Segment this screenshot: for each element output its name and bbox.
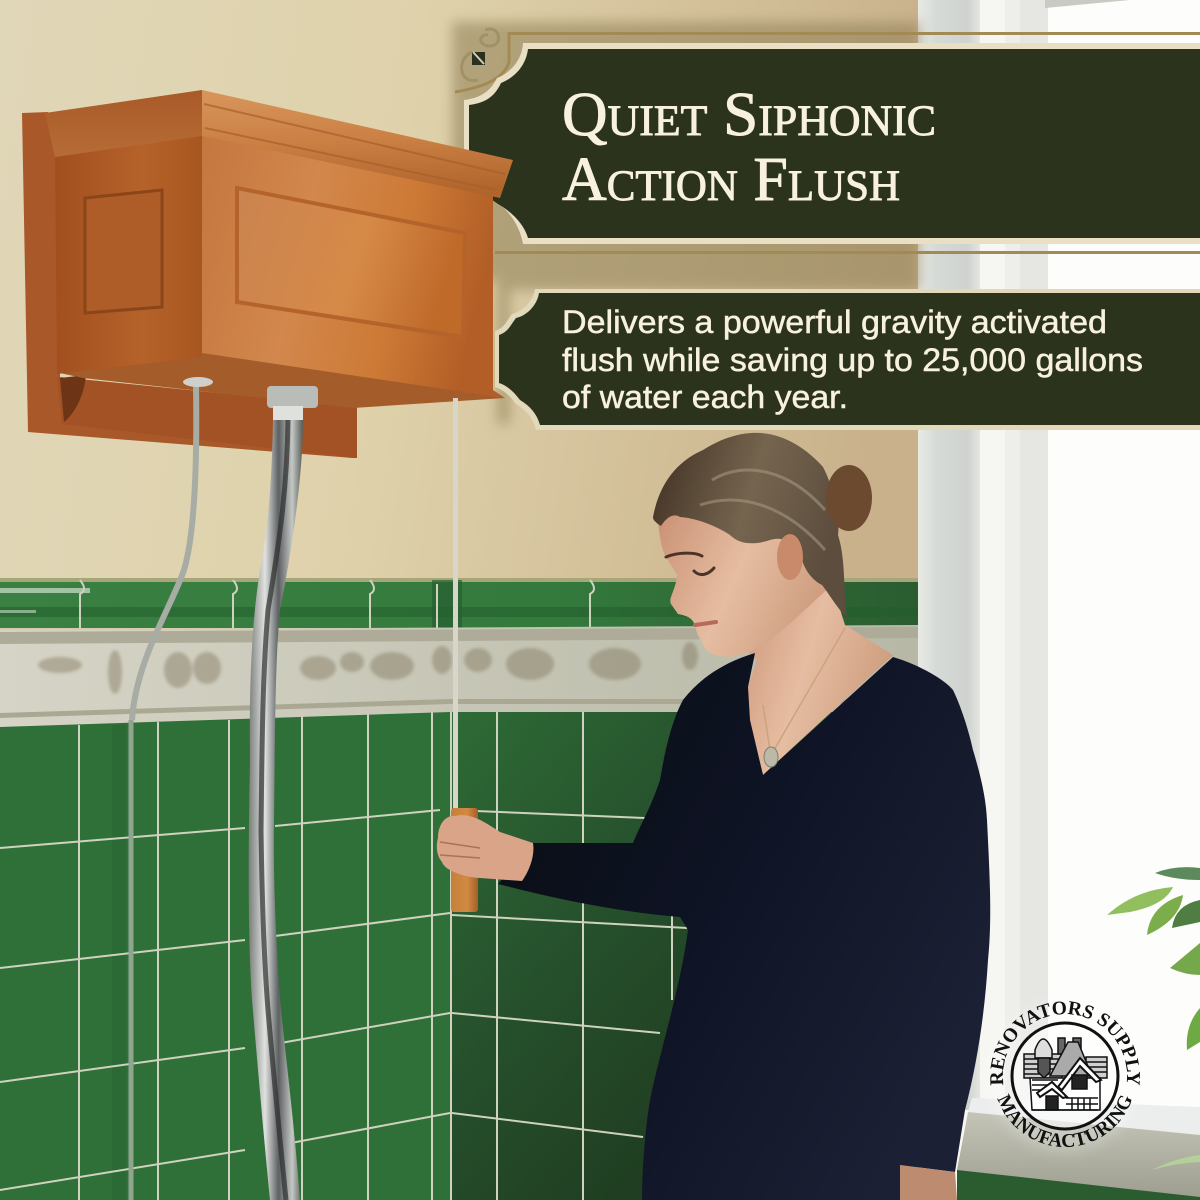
ear bbox=[777, 534, 803, 580]
hair bun bbox=[826, 465, 872, 531]
tank front face bbox=[202, 130, 505, 398]
sweater bbox=[498, 653, 990, 1200]
description banner bbox=[495, 289, 1200, 430]
crown molding front bbox=[202, 90, 513, 198]
small feather glyph bbox=[472, 52, 485, 65]
front panel bbox=[237, 188, 465, 337]
logo house illustration bbox=[1024, 1038, 1107, 1110]
houseplant leaves bbox=[1107, 867, 1200, 1170]
outer gold rule lines bbox=[455, 34, 1200, 252]
logo arc text: RENOVATORS SUPPLY bbox=[990, 1001, 1140, 1086]
pull cord bbox=[453, 398, 458, 810]
description text bbox=[562, 304, 1143, 415]
description text: Delivers a powerful gravity activated bbox=[562, 304, 1107, 340]
necklace bbox=[763, 628, 845, 750]
wooden pull handle bbox=[451, 808, 478, 912]
tank side face bbox=[55, 130, 202, 374]
tan shading behind banners bbox=[452, 22, 920, 424]
neck and chest bbox=[735, 560, 893, 775]
Renovators Supply Manufacturing logo bbox=[990, 1001, 1140, 1153]
description text: of water each year. bbox=[562, 379, 848, 415]
lower hand bbox=[900, 1165, 957, 1200]
corner scroll ornament bbox=[462, 29, 499, 81]
description text: flush while saving up to 25,000 gallons bbox=[562, 342, 1143, 378]
logo halo bbox=[989, 1000, 1141, 1152]
banner frame bbox=[464, 43, 1200, 244]
finger gaps bbox=[440, 842, 480, 858]
pendant bbox=[764, 747, 778, 767]
window and frame bbox=[918, 0, 1200, 1200]
title banner bbox=[464, 43, 1200, 244]
bracket shadow bbox=[60, 375, 86, 422]
thin chrome supply pipe bbox=[131, 377, 213, 1200]
wooden high tank bbox=[22, 90, 513, 458]
title text: Action Flush bbox=[562, 146, 900, 214]
side panel bbox=[85, 190, 162, 313]
plaster wall bbox=[0, 0, 925, 590]
hand gripping handle bbox=[437, 815, 533, 881]
brow, eye and lips bbox=[666, 553, 716, 625]
woman pulling the chain bbox=[437, 433, 990, 1200]
logo ring bbox=[1012, 1023, 1118, 1129]
title text: Quiet Siphonic bbox=[562, 81, 936, 149]
wall mounting board bbox=[22, 112, 357, 458]
tank underside bbox=[55, 350, 505, 408]
face bbox=[658, 505, 830, 657]
description panel bbox=[499, 293, 1200, 425]
molding grooves bbox=[204, 104, 505, 190]
hair bbox=[653, 433, 847, 617]
logo arc text bbox=[990, 1001, 1140, 1148]
large chrome flush pipe bbox=[249, 386, 318, 1200]
hair streaks bbox=[700, 470, 825, 550]
title text bbox=[562, 81, 936, 214]
lower bracket bbox=[57, 377, 357, 458]
decorative frieze tile band bbox=[0, 625, 918, 727]
banner panel bbox=[469, 49, 1200, 238]
crown molding side bbox=[45, 90, 202, 157]
logo arc text: MANUFACTURING bbox=[997, 1093, 1132, 1148]
description frame bbox=[495, 289, 1200, 430]
green tile wainscot bbox=[0, 578, 918, 1200]
